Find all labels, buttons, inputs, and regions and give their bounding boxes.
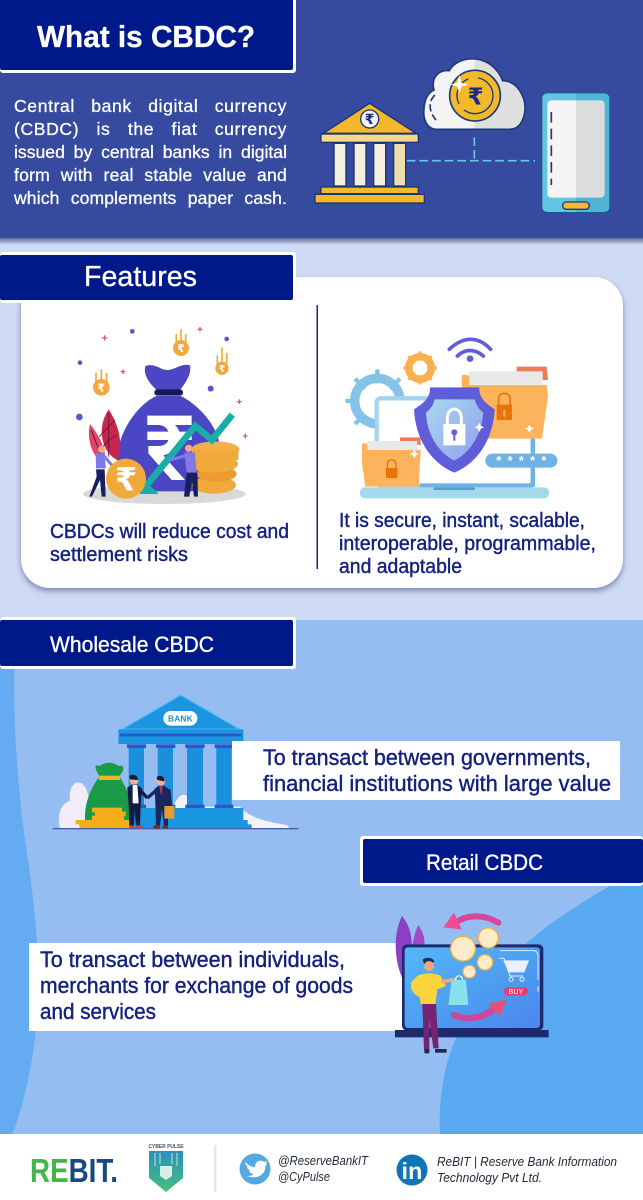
features card [21,277,623,588]
big rupee coin [106,459,146,499]
orange gear [403,351,437,385]
laptop [377,398,533,486]
illustration: online shopping laptop [395,913,549,1053]
sparkles [76,329,229,420]
twitter handles: @ReserveBankIT [278,1153,369,1168]
footer divider [214,1145,216,1192]
person right [170,445,198,497]
logo: ReBIT: REBIT. [30,1152,118,1189]
title box: What is CBDC? [37,19,255,54]
falling coins: ₹ [177,343,185,355]
retail description: merchants for exchange of goods [40,973,353,998]
logo: Cyber Pulse shield: CYBER PULSE [148,1144,184,1150]
shield with lock [414,387,495,473]
retail description: To transact between individuals, [40,947,345,972]
icon: phone [542,93,610,213]
features heading [0,252,296,303]
businessman right [147,776,174,829]
illustration: money bag, arrow and coins: ₹ [115,462,137,498]
trend arrow [148,415,232,484]
intro paragraph: which complements paper cash. [14,188,287,208]
text: cost and risk feature: CBDCs will reduce cost and [50,521,289,543]
twitter handles: @CyPulse [278,1169,330,1184]
cart icon [499,958,529,981]
arrow bottom [454,1007,497,1018]
falling coins: ₹ [98,382,106,394]
wholesale heading: Wholesale CBDC [50,632,214,657]
text: secure feature: It is secure, instant, scalable, [339,510,585,532]
small folder [400,437,421,445]
illustration: bank with handshake [53,695,299,829]
building [122,695,240,729]
wholesale description: financial institutions with large value [263,771,611,796]
connector dashes [407,137,535,161]
wholesale heading [0,617,296,669]
blue gear [345,369,400,424]
falling coins [93,330,229,396]
large folder [517,367,548,380]
intro paragraph: (CBDC) is the fiat currency [14,119,287,139]
icon: bank [315,103,424,203]
twitter handles [278,1153,369,1184]
icon: twitter [240,1154,270,1184]
illustration: bank, cloud coin and phone [315,59,610,213]
falling coins: ₹ [219,364,225,374]
gold bars [76,808,133,828]
plant [102,409,120,460]
shopper [411,958,457,1053]
text: secure feature [339,510,596,578]
coins [451,928,498,978]
features heading: Features [84,261,197,293]
intro paragraph [14,96,287,208]
buy badge: BUY [509,989,524,996]
coin stack [190,441,239,494]
text: secure feature: interoperable, programmable, [339,533,596,555]
text: secure feature: and adaptable [339,556,462,578]
foliage [59,782,89,828]
retail heading [360,836,643,886]
illustration: shield, laptop and folders [345,339,557,498]
icon: linkedin [396,1154,428,1186]
logo: Cyber Pulse shield [148,1144,184,1192]
rupee on bag [147,416,192,480]
purple leaves [396,916,412,983]
password pill [485,454,557,468]
laptop [402,944,543,1030]
shopping bag [448,976,468,1005]
wholesale description: To transact between governments, [263,745,591,770]
arrow top [455,916,498,923]
title box [0,0,296,73]
wifi icon [449,339,491,356]
intro paragraph: form with real stable value and [14,165,287,185]
icon: cloud with rupee coin [424,59,525,129]
sparkles [410,423,534,458]
ground line [53,828,299,829]
intro paragraph: Central bank digital currency [14,96,287,116]
illustration: shield, laptop and folders: ***** [496,454,546,468]
text: cost and risk feature: settlement risks [50,544,188,566]
text: cost and risk feature [50,521,289,566]
illustration: bank with handshake: BANK [168,714,193,724]
icon: linkedin: in [402,1158,422,1184]
linkedin name: ReBIT | Reserve Bank Information [437,1154,617,1169]
illustration: money bag, arrow and coins [76,327,248,504]
linkedin name: Technology Pvt Ltd. [437,1170,542,1185]
green money bag [85,763,132,823]
retail heading: Retail CBDC [426,850,543,875]
wholesale description [232,741,620,800]
buy badge [504,987,528,996]
money bag [145,365,190,390]
retail description [29,943,404,1031]
intro paragraph: issued by central banks in digital [14,142,287,162]
retail description: and services [40,999,156,1024]
businessman left [127,775,147,828]
illustration: bank, cloud coin and phone: ₹ [365,111,375,127]
illustration: bank, cloud coin and phone: ₹ [468,84,484,110]
ground shadow [83,484,246,504]
person left [89,446,112,497]
linkedin name [437,1154,617,1185]
